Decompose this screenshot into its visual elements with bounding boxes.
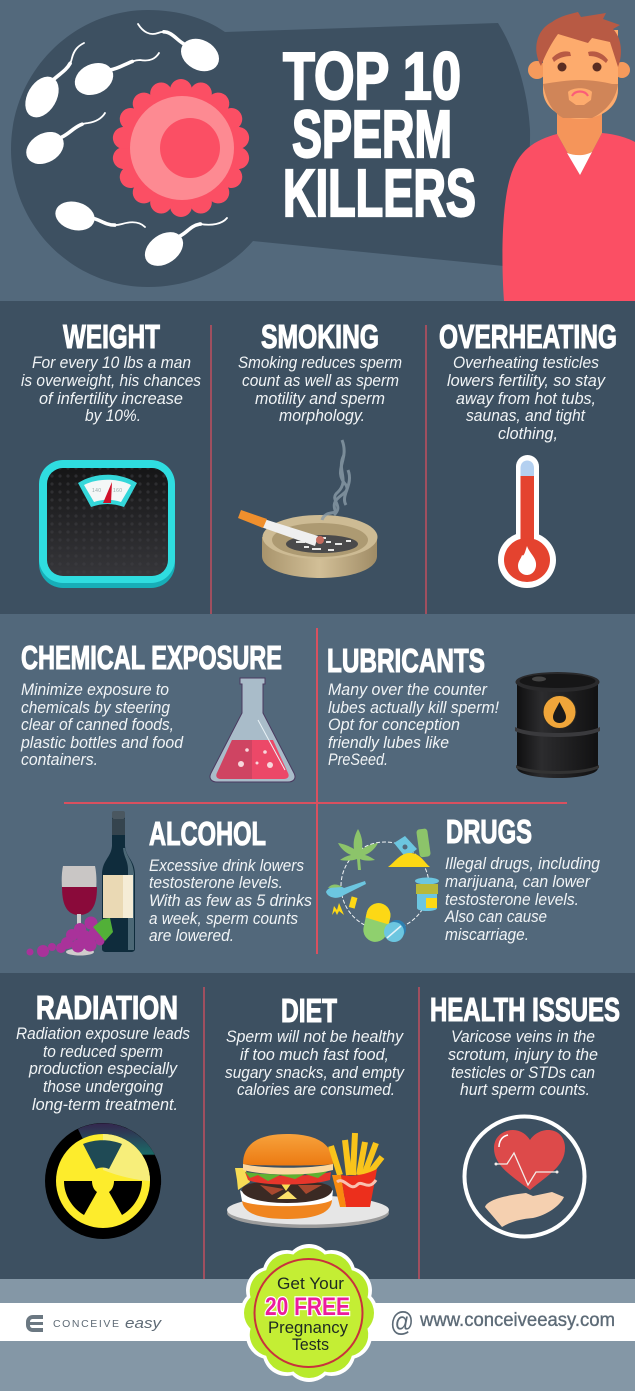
text: drugs bbox=[444, 855, 601, 944]
text: diet: if too much fast food, bbox=[240, 1046, 389, 1064]
icon: bathroom scale: 140 bbox=[92, 488, 101, 494]
icon: flask bbox=[210, 678, 295, 782]
text: radiation: Radiation exposure leads bbox=[16, 1025, 190, 1043]
text: overheating: away from hot tubs, bbox=[456, 390, 596, 408]
heading: weight: WEIGHT bbox=[63, 318, 160, 355]
text: smoking: Smoking reduces sperm bbox=[238, 354, 402, 372]
text: drugs: Illegal drugs, including bbox=[445, 855, 601, 873]
website bbox=[390, 1306, 615, 1337]
dividers bbox=[211, 325, 426, 614]
icon: burger and fries bbox=[227, 1133, 389, 1228]
heading: smoking: SMOKING bbox=[261, 318, 379, 355]
text: overheating: clothing, bbox=[498, 425, 558, 443]
text: health issues: Varicose veins in the bbox=[451, 1028, 595, 1046]
text: lubricants: PreSeed. bbox=[328, 751, 388, 769]
dividers bbox=[64, 628, 567, 954]
egg cell bbox=[111, 79, 251, 217]
icon: ashtray and cigarette bbox=[238, 440, 378, 578]
icon: heart in hand bbox=[464, 1116, 584, 1236]
website: @ bbox=[390, 1306, 414, 1337]
icon: oil barrel bbox=[515, 672, 600, 778]
icon: radiation symbol bbox=[45, 1123, 161, 1239]
title: KILLERS bbox=[283, 156, 476, 231]
text: lubricants: Opt for conception bbox=[328, 716, 460, 734]
text: alcohol bbox=[149, 857, 312, 945]
text: alcohol: testosterone levels. bbox=[149, 874, 283, 892]
dividers bbox=[204, 987, 419, 1279]
text: lubricants: Many over the counter bbox=[328, 681, 488, 699]
text: smoking: morphology. bbox=[279, 407, 365, 425]
heading: radiation: RADIATION bbox=[36, 989, 178, 1026]
text: alcohol: a week, sperm counts bbox=[149, 910, 298, 928]
panel: radiation / diet / health issues bbox=[16, 987, 620, 1279]
text: drugs: miscarriage. bbox=[445, 926, 529, 944]
logo bbox=[26, 1315, 163, 1332]
text: weight: For every 10 lbs a man bbox=[32, 354, 191, 372]
text: diet bbox=[225, 1028, 406, 1099]
icon: drugs ring bbox=[326, 828, 439, 944]
text: radiation: long-term treatment. bbox=[32, 1096, 178, 1114]
text: lubricants bbox=[328, 681, 499, 769]
text: health issues bbox=[448, 1028, 598, 1099]
text: chemical exposure: chemicals by steering bbox=[21, 699, 171, 717]
badge: 20 FREE bbox=[265, 1293, 350, 1321]
text: overheating: Overheating testicles bbox=[453, 354, 599, 372]
icon: thermometer bbox=[498, 455, 556, 588]
text: drugs: Also can cause bbox=[444, 908, 547, 926]
worried man bbox=[502, 12, 635, 301]
text: smoking bbox=[238, 354, 402, 425]
text: chemical exposure: containers. bbox=[21, 751, 98, 769]
text: diet: calories are consumed. bbox=[237, 1081, 395, 1099]
text: alcohol: With as few as 5 drinks bbox=[149, 892, 312, 910]
text: alcohol: are lowered. bbox=[149, 927, 234, 945]
text: lubricants: lubes actually kill sperm! bbox=[328, 699, 499, 717]
icon: bathroom scale: 160 bbox=[113, 488, 122, 494]
text: radiation: production especially bbox=[28, 1060, 179, 1078]
text: radiation: to reduced sperm bbox=[43, 1043, 163, 1061]
badge: Pregnancy bbox=[268, 1318, 348, 1337]
heading: lubricants: LUBRICANTS bbox=[327, 642, 485, 679]
icon: bathroom scale bbox=[39, 460, 175, 588]
text: drugs: marijuana, can lower bbox=[445, 873, 591, 891]
title bbox=[283, 39, 476, 231]
white band bbox=[0, 1303, 635, 1341]
text: drugs: testosterone levels. bbox=[445, 891, 579, 909]
badge: Tests bbox=[292, 1335, 329, 1354]
website: www.conceiveeasy.com bbox=[419, 1310, 615, 1331]
heading: diet: DIET bbox=[281, 992, 337, 1029]
text: weight: of infertility increase bbox=[39, 390, 183, 408]
logo: easy bbox=[125, 1315, 163, 1332]
heading: chemical exposure: CHEMICAL EXPOSURE bbox=[21, 639, 282, 676]
text: radiation: those undergoing bbox=[43, 1078, 164, 1096]
badge: Get Your bbox=[277, 1274, 344, 1293]
text: health issues: testicles or STDs can bbox=[451, 1064, 595, 1082]
text: weight bbox=[21, 354, 201, 425]
text: overheating bbox=[447, 354, 607, 443]
title: SPERM bbox=[292, 97, 452, 172]
text: overheating: saunas, and tight bbox=[466, 407, 586, 425]
text: diet: Sperm will not be healthy bbox=[226, 1028, 405, 1046]
text: chemical exposure bbox=[20, 681, 184, 769]
logo: CONCEIVE bbox=[53, 1318, 119, 1330]
text: health issues: hurt sperm counts. bbox=[460, 1081, 590, 1099]
text: weight: by 10%. bbox=[85, 407, 141, 425]
text: smoking: count as well as sperm bbox=[242, 372, 399, 390]
panel: chemical exposure / lubricants / alcohol / drugs bbox=[20, 628, 601, 957]
panel: header bbox=[11, 10, 635, 301]
text: diet: sugary snacks, and empty bbox=[225, 1064, 406, 1082]
text: alcohol: Excessive drink lowers bbox=[149, 857, 304, 875]
icon: wine bottle, glass and grapes bbox=[26, 811, 135, 957]
magnifier backdrop bbox=[11, 10, 530, 287]
text: weight: is overweight, his chances bbox=[21, 372, 201, 390]
badge bbox=[237, 1241, 381, 1385]
text: lubricants: friendly lubes like bbox=[328, 734, 449, 752]
text: chemical exposure: Minimize exposure to bbox=[21, 681, 169, 699]
text: health issues: scrotum, injury to the bbox=[448, 1046, 598, 1064]
text: smoking: motility and sperm bbox=[255, 390, 385, 408]
text: chemical exposure: clear of canned foods, bbox=[21, 716, 174, 734]
sperm cells bbox=[18, 24, 227, 273]
text: overheating: lowers fertility, so stay bbox=[447, 372, 607, 390]
heading: alcohol: ALCOHOL bbox=[149, 815, 266, 852]
panel: footer bbox=[0, 1241, 635, 1385]
panel: weight / smoking / overheating bbox=[21, 318, 617, 614]
heading: drugs: DRUGS bbox=[446, 813, 532, 850]
title: TOP 10 bbox=[283, 39, 461, 114]
text: radiation bbox=[16, 1025, 190, 1114]
text: chemical exposure: plastic bottles and food bbox=[20, 734, 184, 752]
